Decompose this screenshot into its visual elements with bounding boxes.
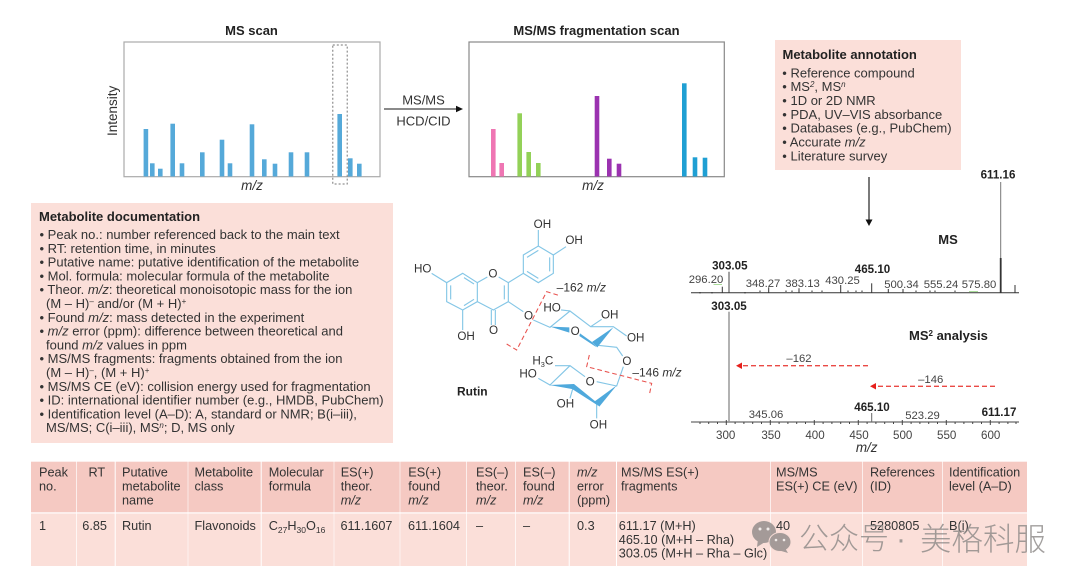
atom labels: OH bbox=[457, 330, 475, 343]
peak labels: 575.80 bbox=[962, 279, 996, 291]
list: – bbox=[89, 366, 94, 375]
header labels: theor. bbox=[341, 480, 372, 494]
atom labels bbox=[414, 218, 644, 431]
arrow: -162 loss bbox=[736, 353, 868, 369]
data values: Rutin bbox=[122, 519, 152, 533]
tick labels bbox=[716, 429, 1000, 442]
header labels: fragments bbox=[621, 480, 677, 494]
heading: MS/MS fragmentation scan: MS/MS fragmentation scan bbox=[513, 23, 680, 38]
header labels: found bbox=[408, 480, 440, 494]
tick labels: 300 bbox=[716, 429, 735, 442]
list: ; D, MS only bbox=[164, 420, 235, 435]
data values: 611.1607 bbox=[340, 519, 392, 533]
label: Rutin: Rutin bbox=[457, 384, 488, 398]
list: • ID: international identifier number (e.g., HMDB, PubChem) bbox=[40, 393, 384, 408]
list: (M – H) bbox=[46, 365, 89, 380]
atom labels: HO bbox=[519, 368, 537, 381]
arrow: -146 loss bbox=[870, 374, 995, 390]
list bbox=[40, 227, 384, 435]
arrow: MS/MS HCD/CID bbox=[384, 92, 463, 129]
data values: H bbox=[287, 519, 297, 533]
y-axis label: Intensity bbox=[105, 85, 120, 136]
tick labels: 550 bbox=[937, 429, 956, 442]
label: MS2 analysis: analysis bbox=[933, 328, 988, 343]
list: • 1D or 2D NMR bbox=[782, 93, 876, 108]
watermark text: · bbox=[896, 523, 906, 556]
list: • RT: retention time, in minutes bbox=[40, 241, 216, 256]
list: • Theor. m/z: theoretical monoisotopic mass for the ion bbox=[40, 282, 352, 297]
header labels: class bbox=[194, 480, 223, 494]
peak labels: 500.34 bbox=[884, 279, 919, 291]
atom labels: HO bbox=[543, 301, 561, 314]
chart: MS spectrum bbox=[689, 168, 1019, 294]
list: • MS/MS fragments: fragments obtained from the ion bbox=[40, 351, 342, 366]
peak labels: 611.17 bbox=[982, 406, 1016, 419]
arrow: -146 loss: –146 bbox=[918, 374, 943, 386]
list: + bbox=[145, 366, 150, 375]
data values: 16 bbox=[316, 525, 326, 535]
header labels: Identification bbox=[949, 466, 1020, 480]
data values: 5280805 bbox=[870, 519, 919, 533]
header labels: Metabolite bbox=[194, 466, 253, 480]
data row background bbox=[31, 514, 1027, 566]
cleavage: -162 bbox=[507, 280, 606, 350]
header labels: m/z bbox=[341, 493, 362, 507]
peak labels: 345.06 bbox=[749, 409, 783, 421]
data values: 611.17 (M+H) bbox=[619, 519, 696, 533]
tick labels: 400 bbox=[805, 429, 825, 442]
list: n bbox=[841, 80, 846, 89]
header labels: MS/MS ES(+) bbox=[621, 466, 699, 480]
list: , MS bbox=[814, 79, 841, 94]
chemical structure: Rutin bbox=[414, 218, 682, 431]
peak labels: 555.24 bbox=[924, 279, 958, 291]
list: n bbox=[159, 421, 164, 430]
header labels: (ID) bbox=[870, 480, 891, 494]
atom labels: OH bbox=[601, 309, 618, 322]
header labels: (ppm) bbox=[577, 493, 610, 507]
watermark text: 美格科服 bbox=[920, 514, 1046, 560]
list: , (M + H) bbox=[94, 365, 145, 380]
atom labels: O bbox=[586, 375, 595, 388]
header labels: m/z bbox=[523, 493, 544, 507]
cleavage: -146 bbox=[587, 355, 682, 395]
label: MS: MS bbox=[938, 232, 958, 247]
data values: 611.1604 bbox=[408, 519, 460, 533]
bars: pink fragments bbox=[491, 129, 504, 176]
data values: Flavonoids bbox=[194, 519, 256, 533]
bars: blue fragments bbox=[682, 83, 707, 176]
plot frame bbox=[124, 42, 380, 177]
atom labels: O bbox=[489, 324, 498, 337]
header labels: error bbox=[577, 480, 605, 494]
header labels: ES(–) bbox=[476, 466, 508, 480]
atom labels: OH bbox=[557, 397, 574, 410]
list: (M – H) bbox=[46, 296, 89, 311]
data values: C bbox=[269, 519, 278, 533]
tick labels: 500 bbox=[893, 429, 912, 442]
peak labels bbox=[711, 300, 1016, 422]
peak labels: 430.25 bbox=[825, 275, 860, 287]
list: 2 bbox=[809, 80, 815, 89]
list: • Literature survey bbox=[782, 148, 888, 163]
watermark: WeChat public account bbox=[752, 514, 1046, 560]
list: • MS bbox=[782, 79, 810, 94]
header labels: name bbox=[122, 493, 154, 507]
header labels: RT bbox=[88, 466, 105, 480]
header labels: Molecular bbox=[269, 466, 324, 480]
panel: MS/MS fragmentation scan chart bbox=[469, 23, 724, 193]
x axis with ticks bbox=[691, 420, 1019, 425]
x-axis label: m/z bbox=[856, 440, 878, 455]
peak labels: 303.05 bbox=[712, 260, 748, 272]
bonds bbox=[432, 230, 627, 418]
peak labels: 383.13 bbox=[785, 278, 820, 290]
header labels: no. bbox=[39, 480, 57, 494]
arrow: annotation to spectrum bbox=[866, 177, 872, 226]
x-axis label: m/z bbox=[582, 178, 604, 193]
peaks bbox=[700, 182, 1015, 294]
list: • MS/MS CE (eV): collision energy used for fragmentation bbox=[40, 379, 371, 394]
panel: Metabolite documentation bbox=[31, 203, 393, 443]
table: metabolite results bbox=[31, 462, 1027, 566]
data values: 6.85 bbox=[82, 519, 107, 533]
peak labels bbox=[689, 168, 1016, 291]
cleavage: -146: –146 m/z bbox=[632, 366, 682, 380]
list: and/or (M + H) bbox=[94, 296, 182, 311]
header labels: ES(+) bbox=[408, 466, 441, 480]
atom labels: O bbox=[488, 267, 497, 280]
list: • Databases (e.g., PubChem) bbox=[782, 121, 952, 136]
data values: 0.3 bbox=[577, 519, 595, 533]
atom labels: OH bbox=[534, 218, 551, 231]
watermark text: 公众号 bbox=[799, 514, 889, 558]
arrow: MS/MS HCD/CID: HCD/CID bbox=[396, 114, 451, 129]
selection: dashed precursor window bbox=[333, 45, 347, 184]
atom labels: H bbox=[532, 354, 541, 367]
header labels: m/z bbox=[476, 493, 497, 507]
list bbox=[782, 65, 952, 163]
list: • Identification level (A–D): A, standard or NMR; B(i–iii), bbox=[40, 406, 357, 421]
baseline bbox=[691, 292, 1019, 294]
header labels: found bbox=[523, 480, 555, 494]
header labels: Putative bbox=[122, 466, 168, 480]
data values: 40 bbox=[776, 519, 790, 533]
header labels: m/z bbox=[577, 466, 598, 480]
peak labels: 465.10 bbox=[855, 263, 890, 276]
data values: – bbox=[476, 519, 484, 533]
header labels: level (A–D) bbox=[949, 480, 1012, 494]
arrow: MS/MS HCD/CID: MS/MS bbox=[402, 92, 445, 107]
data values: 27 bbox=[278, 525, 288, 535]
data values: 1 bbox=[39, 519, 46, 533]
peak labels: 348.27 bbox=[746, 278, 780, 290]
bars: purple fragments bbox=[595, 96, 621, 176]
list: • m/z error (ppm): difference between theoretical and bbox=[40, 324, 343, 339]
list: • PDA, UV–VIS absorbance bbox=[782, 107, 942, 122]
label: MS2 analysis: 2 bbox=[928, 329, 934, 338]
data values: B(i) bbox=[949, 519, 969, 533]
header labels: m/z bbox=[408, 493, 429, 507]
bars: MS peaks bbox=[144, 114, 362, 176]
list: + bbox=[182, 297, 187, 306]
atom labels: OH bbox=[627, 331, 644, 344]
panel: MS scan chart bbox=[105, 23, 380, 193]
bars: green fragments bbox=[517, 113, 541, 176]
data values: – bbox=[523, 519, 531, 533]
heading: Metabolite annotation bbox=[782, 47, 917, 62]
atom labels: OH bbox=[590, 418, 607, 431]
arrow: -162 loss: –162 bbox=[786, 353, 812, 365]
label: MS2 analysis: MS bbox=[909, 328, 928, 343]
heading: MS scan: MS scan bbox=[225, 23, 278, 38]
tick labels: 450 bbox=[849, 429, 869, 442]
atom labels: 3 bbox=[541, 360, 545, 369]
tick labels: 350 bbox=[761, 429, 781, 442]
x-axis label: m/z bbox=[241, 178, 263, 193]
list: – bbox=[89, 297, 94, 306]
data values bbox=[39, 519, 969, 561]
data values: 465.10 (M+H – Rha) bbox=[619, 533, 734, 547]
header labels: Peak bbox=[39, 466, 69, 480]
header labels: References bbox=[870, 466, 935, 480]
heading: Metabolite documentation bbox=[39, 209, 200, 224]
wedge bonds bbox=[549, 327, 617, 407]
list: • Putative name: putative identification of the metabolite bbox=[40, 255, 359, 270]
header labels: ES(+) bbox=[341, 466, 373, 480]
peak labels: 523.29 bbox=[905, 410, 940, 422]
minor peak bbox=[871, 413, 873, 422]
atom labels: C bbox=[545, 354, 553, 367]
atom labels: O bbox=[571, 325, 580, 338]
trace marks: green bbox=[714, 284, 978, 292]
list: MS/MS; C(i–iii), MS bbox=[46, 420, 159, 435]
header labels bbox=[39, 466, 1020, 507]
atom labels: O bbox=[622, 355, 631, 368]
peak labels: 296.20 bbox=[689, 274, 723, 286]
header labels: theor. bbox=[476, 480, 508, 494]
data values: 303.05 (M+H – Rha – Glc) bbox=[619, 547, 767, 561]
list: • Reference compound bbox=[782, 65, 915, 80]
peak labels: 611.16 bbox=[981, 168, 1016, 182]
header labels: formula bbox=[269, 480, 312, 494]
watermark text bbox=[799, 514, 1046, 560]
header row background bbox=[31, 462, 1027, 512]
list: • Accurate m/z bbox=[782, 135, 866, 150]
atom labels: HO bbox=[414, 263, 431, 276]
data values: O bbox=[306, 519, 316, 533]
tick labels: 600 bbox=[981, 429, 1000, 442]
chart: MS2 spectrum bbox=[691, 300, 1019, 455]
list: found m/z values in ppm bbox=[46, 337, 187, 352]
list: • Found m/z: mass detected in the experiment bbox=[40, 310, 305, 325]
icon: WeChat bubbles bbox=[752, 521, 791, 553]
panel: Metabolite annotation bbox=[775, 40, 961, 170]
peaks bbox=[728, 312, 730, 422]
data values: 30 bbox=[297, 525, 306, 535]
cleavage: -162: –162 m/z bbox=[557, 280, 606, 294]
peak labels: 303.05 bbox=[711, 300, 747, 313]
header labels: ES(–) bbox=[523, 466, 555, 480]
header labels: MS/MS bbox=[776, 466, 818, 480]
plot frame bbox=[469, 42, 724, 177]
atom labels: OH bbox=[565, 234, 583, 247]
list: • Mol. formula: molecular formula of the metabolite bbox=[40, 268, 329, 283]
header labels: ES(+) CE (eV) bbox=[776, 480, 857, 494]
peak labels: 465.10 bbox=[854, 401, 890, 414]
atom labels: O bbox=[524, 310, 533, 323]
list: • Peak no.: number referenced back to the main text bbox=[40, 227, 340, 242]
header labels: metabolite bbox=[122, 480, 181, 494]
